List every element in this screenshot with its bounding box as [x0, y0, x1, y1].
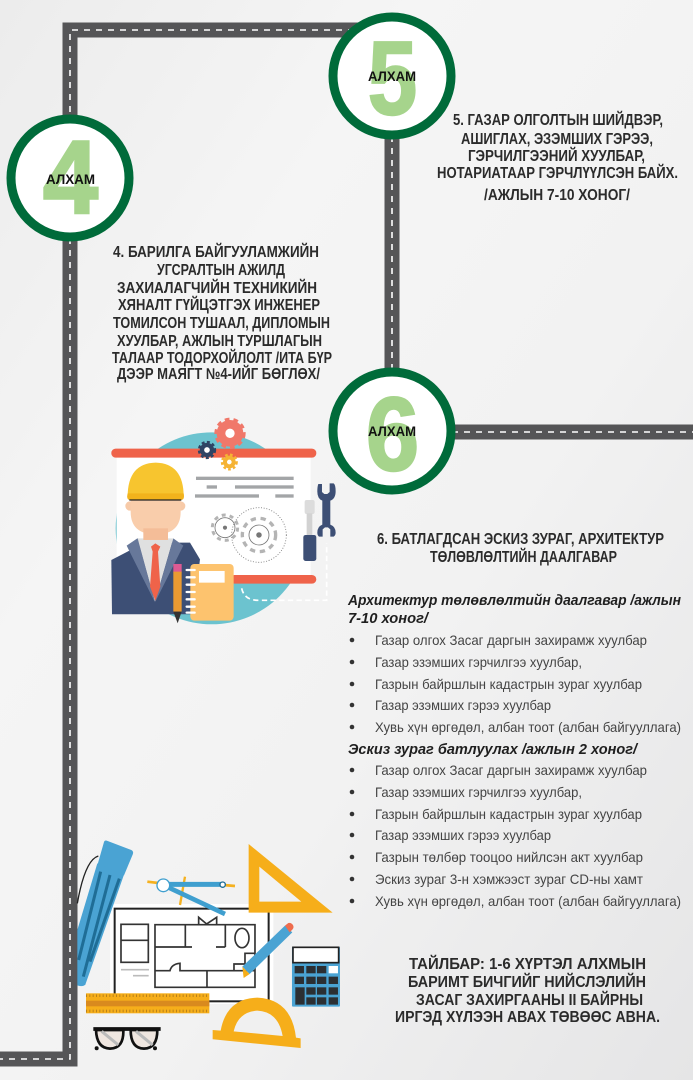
note text: ЗАСАГ ЗАХИРГААНЫ II БАЙРНЫ	[416, 991, 643, 1009]
icon: ruler	[86, 993, 209, 1013]
architecture task list: Газар эзэмших гэрээ хуулбар	[375, 697, 551, 713]
step 5 text: /АЖЛЫН 7-10 ХОНОГ/	[484, 187, 631, 204]
step 4 text: ХЯНАЛТ ГҮЙЦЭТГЭХ ИНЖЕНЕР	[118, 296, 320, 314]
sketch approval list: Газрын байршлын кадастрын зураг хуулбар	[375, 806, 642, 822]
icon: floor plan sheet	[110, 904, 273, 1004]
architecture task list: Архитектур төлөвлөлтийн даалгавар /ажлын	[347, 593, 681, 609]
note text: БАРИМТ БИЧГИЙГ НИЙСЛЭЛИЙН	[408, 973, 646, 991]
architecture task list: 7-10 хоног/	[348, 611, 430, 627]
icon: gears on board	[199, 419, 244, 469]
sketch approval list: Газар эзэмших гэрээ хуулбар	[375, 827, 551, 843]
architecture task list: Газар олгох Засаг даргын захирамж хуулбар	[375, 632, 647, 648]
step 6 badge	[333, 372, 451, 493]
architecture task list	[347, 593, 681, 735]
step 5 text: АШИГЛАХ, ЭЗЭМШИХ ГЭРЭЭ,	[461, 131, 653, 148]
sketch approval list: Эскиз зураг 3-н хэмжээст зураг CD-ны хамт	[375, 871, 644, 887]
gear diagrams	[212, 508, 286, 562]
step 4 text: ХУУЛБАР, АЖЛЫН ТУРШЛАГЫН	[117, 333, 322, 350]
illustration: drafting tools	[77, 840, 340, 1050]
step 4 text: 4. БАРИЛГА БАЙГУУЛАМЖИЙН	[113, 243, 319, 261]
icon: wrench	[317, 483, 336, 537]
step 5 text: ГЭРЧИЛГЭЭНИЙ ХУУЛБАР,	[468, 147, 645, 165]
step 4 text	[112, 243, 332, 383]
architecture task list: Газрын байршлын кадастрын зураг хуулбар	[375, 676, 642, 692]
icon: glasses	[93, 1029, 161, 1050]
sketch approval list: Газрын төлбөр тооцоо нийлсэн акт хуулбар	[375, 849, 643, 865]
icon: tube	[77, 840, 133, 986]
note text: ИРГЭД ХҮЛЭЭН АВАХ ТӨВӨӨС АВНА.	[395, 1009, 660, 1026]
step 5 badge	[333, 17, 451, 137]
sketch approval list: Газар эзэмших гэрчилгээ хуулбар,	[375, 784, 582, 800]
step 4 text: ТОМИЛСОН ТУШААЛ, ДИПЛОМЫН	[113, 315, 330, 332]
step 4 badge	[11, 119, 129, 237]
architecture task list: Хувь хүн өргөдөл, албан тоот (албан байгууллага)	[375, 719, 681, 735]
engineer figure	[111, 463, 200, 614]
step 5 badge: АЛХАМ	[368, 68, 416, 84]
icon: screwdriver	[303, 500, 316, 561]
icon: compass	[147, 877, 235, 914]
icon: pencil	[173, 564, 182, 623]
step 6 heading: ТӨЛӨВЛӨЛТИЙН ДААЛГАВАР	[430, 548, 617, 566]
sketch approval list: Газар олгох Засаг даргын захирамж хуулбар	[375, 762, 647, 778]
note text	[395, 955, 660, 1026]
sketch approval list	[348, 742, 681, 909]
step 4 text: УГСРАЛТЫН АЖИЛД	[157, 262, 285, 279]
note text: ТАЙЛБАР: 1-6 ХҮРТЭЛ АЛХМЫН	[409, 955, 646, 973]
icon: set square	[249, 844, 333, 913]
step 4 badge: 4	[43, 120, 98, 236]
step 6 badge: АЛХАМ	[368, 423, 416, 439]
illustration: engineer with board	[111, 419, 336, 624]
step 4 text: ТАЛААР ТОДОРХОЙЛОЛТ /ИТА БҮР	[112, 349, 332, 367]
board text lines	[195, 477, 294, 498]
step 4 text: ЗАХИАЛАГЧИЙН ТЕХНИКИЙН	[117, 279, 317, 297]
icon: blue pencil	[242, 923, 294, 978]
icon: protractor	[213, 998, 301, 1048]
step 6 badge: 6	[366, 377, 419, 493]
architecture task list: Газар эзэмших гэрчилгээ хуулбар,	[375, 654, 582, 670]
step 4 badge: АЛХАМ	[46, 171, 95, 187]
sketch approval list: Хувь хүн өргөдөл, албан тоот (албан байгууллага)	[375, 893, 681, 909]
step 4 text: ДЭЭР МАЯГТ №4-ИЙГ БӨГЛӨХ/	[117, 365, 321, 383]
sketch approval list: Эскиз зураг батлуулах /ажлын 2 хоног/	[348, 742, 639, 758]
icon: calculator	[292, 947, 340, 1007]
step 5 text	[437, 111, 678, 204]
step 6 heading	[377, 531, 664, 566]
icon: notebook	[187, 564, 234, 621]
step 5 badge: 5	[368, 21, 417, 137]
